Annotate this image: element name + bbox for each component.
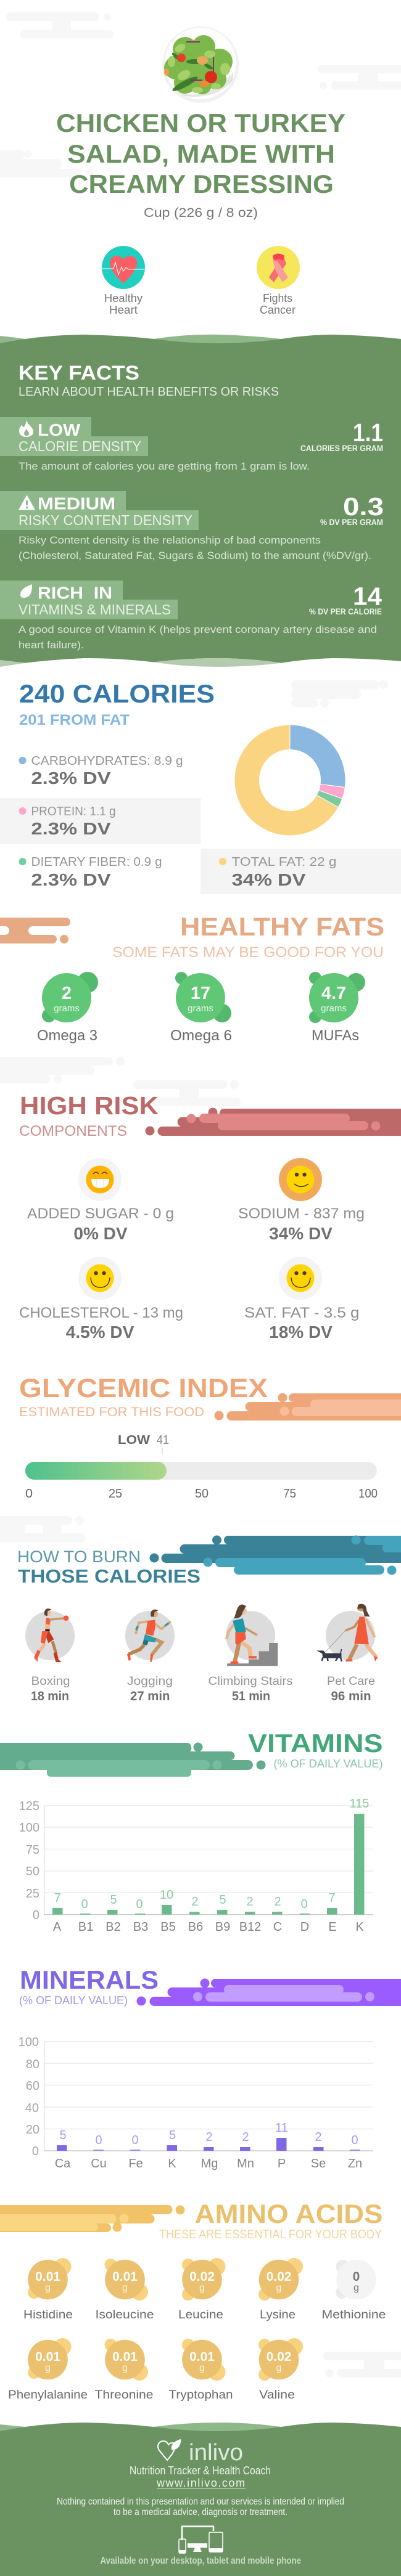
label: climbing stairs: [209, 1675, 292, 1703]
fact: medium risky content density: (Cholesterol, Saturated Fat, Sugars & Sodium) to the amount (%DV/gr).: [19, 550, 371, 561]
risk: cholesterol: CHOLESTEROL - 13 mg: [19, 1305, 183, 1321]
amino: methionine: 0: [353, 2270, 360, 2284]
fact: low calorie density: 1.1: [353, 418, 383, 447]
bar chart: vitamins: C: [273, 1920, 282, 1934]
amino: phenylalanine: [8, 2338, 88, 2402]
bar chart: minerals: 20: [26, 2123, 39, 2137]
amino: threonine: 0.01: [112, 2350, 138, 2364]
heading: how to burn: [17, 1547, 200, 1587]
heading: healthy fats: SOME FATS MAY BE GOOD FOR YOU: [112, 944, 384, 961]
amino: isoleucine: [95, 2259, 154, 2321]
fact: medium risky content density: RISKY CONTENT DENSITY: [19, 512, 192, 528]
footer website link: www.inlivo.com: [156, 2477, 245, 2489]
glycemic axis: [25, 1487, 378, 1501]
amino: isoleucine: Isoleucine: [95, 2309, 154, 2321]
heading: calories: 240 CALORIES: [19, 679, 215, 708]
amino: valine: g: [276, 2363, 281, 2373]
amino: histidine: 0.01: [35, 2270, 60, 2284]
bar chart: vitamins: 2: [274, 1895, 281, 1909]
icon: flame: [19, 420, 33, 437]
heading: glycemic index: ESTIMATED FOR THIS FOOD: [19, 1404, 204, 1419]
heading: glycemic index: [19, 1374, 268, 1419]
label: fights cancer: Cancer: [260, 304, 296, 316]
amino: valine: Valine: [259, 2389, 295, 2402]
label: fights cancer: [260, 292, 296, 316]
heading: healthy fats: HEALTHY FATS: [180, 912, 384, 941]
fat: omega 6: [170, 972, 232, 1044]
amino: phenylalanine: 0.01: [35, 2350, 60, 2364]
heading: healthy fats: [112, 912, 384, 961]
legend: carbohydrates: [19, 754, 183, 788]
amino: histidine: [23, 2258, 73, 2321]
fat: omega 3: [37, 972, 98, 1044]
title: CHICKEN OR TURKEY: [56, 108, 345, 137]
bar chart: vitamins: B1: [78, 1920, 93, 1934]
title: CREAMY DRESSING: [69, 169, 334, 198]
label: pet care: Pet Care: [327, 1675, 375, 1688]
activity: jogging: [125, 1610, 175, 1662]
bar chart: vitamins: D: [300, 1920, 309, 1934]
bar chart: minerals: Se: [311, 2157, 326, 2170]
amino: tryptophan: Tryptophan: [169, 2389, 233, 2402]
top background clouds: [0, 12, 401, 177]
risk: cholesterol: [19, 1257, 183, 1342]
label: fights cancer: Fights: [263, 292, 292, 304]
bar chart: minerals: 0: [95, 2134, 102, 2147]
bar chart: minerals: [19, 2036, 373, 2170]
amino: lysine: Lysine: [260, 2309, 296, 2321]
bar chart: minerals: 100: [19, 2036, 39, 2049]
bar chart: vitamins: 10: [160, 1888, 173, 1902]
icon: fights cancer: [257, 246, 300, 289]
glycemic axis: 50: [195, 1487, 209, 1501]
fact: medium risky content density: 0.3: [343, 492, 384, 521]
bar chart: minerals: 60: [26, 2079, 39, 2093]
amino: methionine: g: [353, 2283, 359, 2293]
bar chart: minerals: 5: [59, 2129, 67, 2142]
fat: omega 6: Omega 6: [170, 1027, 232, 1044]
risk: saturated fat: SAT. FAT - 3.5 g: [244, 1305, 359, 1321]
bar chart: minerals: Mg: [201, 2157, 218, 2170]
amino: threonine: Threonine: [95, 2389, 153, 2402]
label: jogging: [127, 1675, 173, 1703]
panel: key facts: [0, 335, 401, 667]
amino: leucine: 0.02: [189, 2270, 215, 2284]
bar chart: minerals: Fe: [128, 2157, 143, 2170]
bar chart: vitamins: 7: [328, 1891, 336, 1905]
bar chart: vitamins: 115: [350, 1797, 369, 1811]
fact: medium risky content density: MEDIUM: [38, 494, 115, 513]
bar chart: vitamins: 0: [136, 1897, 143, 1911]
fact: rich in vitamins and minerals: % DV PER CALORIE: [309, 607, 382, 616]
amino: tryptophan: 0.01: [189, 2350, 215, 2364]
risk: sodium: [238, 1158, 365, 1243]
decoration: vitamins: [0, 1743, 265, 1777]
bar chart: vitamins: B6: [188, 1920, 203, 1934]
heading: vitamins: (% OF DAILY VALUE): [274, 1758, 382, 1770]
bar chart: minerals: 0: [32, 2145, 39, 2158]
title: SALAD, MADE WITH: [67, 139, 335, 168]
fact: rich in vitamins and minerals: heart failure).: [19, 639, 84, 651]
bar chart: vitamins: B5: [160, 1920, 176, 1934]
bar chart: vitamins: E: [328, 1920, 337, 1934]
bar chart: vitamins: B2: [105, 1920, 121, 1934]
fact: rich in vitamins and minerals: VITAMINS & MINERALS: [19, 601, 171, 618]
label: healthy heart: Heart: [109, 304, 138, 316]
glycemic value: 41: [157, 1433, 169, 1447]
fact: rich in vitamins and minerals: [0, 581, 382, 651]
amino: leucine: g: [199, 2283, 205, 2293]
fat: mufas: 4.7: [321, 984, 346, 1003]
amino: tryptophan: [169, 2339, 233, 2402]
fact: rich in vitamins and minerals: 14: [353, 582, 382, 610]
heading: amino acids: [159, 2199, 382, 2241]
legend: total fat: 34% DV: [232, 870, 306, 889]
label: jogging: 27 min: [130, 1689, 170, 1703]
amino: tryptophan: g: [199, 2363, 205, 2373]
fat: omega 6: 17: [191, 984, 210, 1003]
heading: high risk: [19, 1091, 159, 1139]
bar chart: vitamins: 7: [54, 1891, 61, 1905]
fact: rich in vitamins and minerals: A good source of Vitamin K (helps prevent coronary artery disease and: [19, 624, 377, 635]
label: healthy heart: [104, 292, 143, 316]
heading: how to burn: THOSE CALORIES: [18, 1565, 200, 1587]
amino: methionine: Methionine: [322, 2309, 386, 2321]
amino: leucine: Leucine: [178, 2309, 223, 2321]
bar chart: vitamins: 50: [26, 1865, 39, 1878]
macro row backgrounds: [0, 798, 401, 894]
bar chart: minerals: 0: [131, 2134, 139, 2147]
bar chart: vitamins: 125: [19, 1800, 39, 1813]
fat: mufas: [309, 972, 365, 1044]
background cloud: burn: [0, 1516, 86, 1542]
decoration: burn: [149, 1536, 401, 1575]
heading: amino acids: AMINO ACIDS: [195, 2199, 382, 2229]
logo: inlivo: [158, 2439, 243, 2466]
decoration: glycemic index: [215, 1393, 401, 1420]
risk: added sugar: 0% DV: [73, 1224, 128, 1243]
panel: footer: [0, 2423, 401, 2576]
fat: mufas: grams: [321, 1003, 347, 1014]
fat: omega 6: grams: [188, 1003, 213, 1014]
risk: added sugar: ADDED SUGAR - 0 g: [27, 1205, 174, 1222]
legend: dietary fiber: 2.3% DV: [31, 870, 111, 889]
icon: healthy heart: [102, 246, 145, 289]
bar chart: minerals: Mn: [237, 2157, 254, 2170]
bar chart: vitamins: 75: [26, 1843, 39, 1857]
heading: glycemic index: GLYCEMIC INDEX: [19, 1374, 268, 1403]
bar chart: vitamins: 5: [219, 1893, 226, 1907]
heading: key facts: KEY FACTS: [19, 362, 139, 384]
bar chart: vitamins: 2: [191, 1895, 199, 1909]
glycemic axis: 25: [109, 1487, 122, 1501]
heading: key facts: [19, 362, 279, 399]
amino: histidine: g: [45, 2283, 51, 2293]
glycemic axis: 100: [358, 1487, 378, 1501]
decoration: healthy fats: [0, 918, 70, 944]
icon: leaf: [20, 584, 32, 598]
bar chart: vitamins: K: [355, 1920, 364, 1934]
footer availability note: Available on your desktop, tablet and mobile phone: [100, 2556, 301, 2566]
footer disclaimer: [57, 2497, 344, 2517]
legend: protein: [19, 805, 116, 838]
risk: sodium: 34% DV: [269, 1224, 333, 1243]
amino: lysine: g: [276, 2283, 281, 2293]
heading: vitamins: VITAMINS: [248, 1729, 382, 1758]
risk: saturated fat: [244, 1257, 359, 1342]
activity: climbing stairs: [226, 1604, 278, 1666]
label: boxing: [31, 1675, 70, 1703]
label: jogging: Jogging: [127, 1675, 173, 1688]
fat: omega 3: grams: [54, 1003, 80, 1014]
decoration: minerals: [137, 1978, 401, 2006]
bar chart: minerals: Cu: [91, 2157, 107, 2170]
fact: low calorie density: LOW: [38, 420, 81, 439]
footer disclaimer: to be a medical advice, diagnosis or treatment.: [114, 2507, 287, 2517]
fact: medium risky content density: Risky Content density is the relationship of bad components: [19, 534, 321, 546]
bar chart: vitamins: 0: [300, 1897, 308, 1911]
risk: added sugar: [27, 1158, 174, 1243]
bar chart: vitamins: 100: [19, 1821, 39, 1835]
fact: low calorie density: The amount of calories you are getting from 1 gram is low.: [19, 460, 310, 472]
label: climbing stairs: Climbing Stairs: [209, 1675, 292, 1688]
icon: warning triangle: [19, 495, 35, 510]
bar chart: vitamins: 5: [110, 1893, 117, 1907]
bar chart: minerals: 2: [205, 2130, 213, 2144]
bar chart: vitamins: 2: [246, 1895, 254, 1909]
label: boxing: 18 min: [31, 1689, 69, 1703]
bar chart: vitamins: 0: [33, 1909, 39, 1922]
bar chart: vitamins: A: [53, 1920, 62, 1934]
amino: isoleucine: 0.01: [112, 2270, 138, 2284]
heading: vitamins: [248, 1729, 382, 1770]
title: [56, 108, 345, 198]
label: healthy heart: Healthy: [104, 292, 143, 304]
heading: high risk: COMPONENTS: [19, 1123, 127, 1139]
risk: cholesterol: 4.5% DV: [66, 1323, 134, 1342]
bar chart: minerals: 80: [26, 2058, 39, 2071]
heading: calories: [19, 679, 215, 728]
legend: carbohydrates: CARBOHYDRATES: 8.9 g: [31, 754, 183, 768]
activity: pet care: [316, 1604, 378, 1661]
background clouds: high risk: [0, 1057, 241, 1106]
footer disclaimer: Nothing contained in this presentation and our services is intended or implied: [57, 2497, 344, 2507]
icon: devices: [179, 2527, 223, 2553]
legend: protein: PROTEIN: 1.1 g: [31, 805, 116, 818]
bar chart: vitamins: B9: [215, 1920, 230, 1934]
label: pet care: 96 min: [331, 1689, 371, 1703]
fact: medium risky content density: % DV PER GRAM: [320, 518, 383, 527]
glycemic axis: 0: [25, 1487, 33, 1501]
heading: key facts: LEARN ABOUT HEALTH BENEFITS OR RISKS: [19, 385, 279, 399]
footer tagline: Nutrition Tracker & Health Coach: [130, 2464, 271, 2477]
bar chart: vitamins: 0: [81, 1897, 88, 1911]
glycemic bar: [25, 1462, 377, 1480]
fact: rich in vitamins and minerals: RICH IN: [38, 583, 112, 603]
decoration: high risk: [146, 1108, 401, 1136]
amino: phenylalanine: g: [45, 2363, 51, 2373]
amino: threonine: [95, 2339, 153, 2402]
background cloud: calories: [291, 680, 388, 707]
bar chart: minerals: P: [278, 2157, 286, 2170]
heading: high risk: HIGH RISK: [20, 1091, 159, 1120]
heading: amino acids: THESE ARE ESSENTIAL FOR YOUR BODY: [159, 2228, 382, 2241]
heading: minerals: (% OF DAILY VALUE): [19, 1994, 128, 2007]
legend: carbohydrates: 2.3% DV: [31, 768, 111, 788]
bar chart: minerals: 0: [351, 2134, 358, 2147]
fat: omega 3: 2: [62, 984, 72, 1003]
amino: leucine: [178, 2258, 226, 2321]
fact: medium risky content density: [0, 491, 384, 561]
serving size: Cup (226 g / 8 oz): [144, 206, 258, 220]
bar chart: minerals: 2: [315, 2130, 322, 2144]
legend: total fat: [219, 855, 337, 889]
amino: histidine: Histidine: [23, 2309, 73, 2321]
bar chart: vitamins: B12: [239, 1920, 261, 1934]
heading: how to burn: HOW TO BURN: [17, 1547, 141, 1566]
fact: low calorie density: [0, 417, 383, 472]
label: boxing: Boxing: [31, 1675, 70, 1688]
bar chart: minerals: 5: [169, 2129, 176, 2142]
label: pet care: [327, 1675, 375, 1703]
legend: protein: 2.3% DV: [31, 819, 111, 838]
bar chart: minerals: K: [168, 2157, 176, 2170]
fat: omega 3: Omega 3: [37, 1027, 97, 1044]
risk: saturated fat: 18% DV: [269, 1323, 333, 1342]
amino: threonine: g: [122, 2363, 128, 2373]
glycemic value: LOW: [118, 1433, 150, 1447]
label: climbing stairs: 51 min: [232, 1689, 270, 1703]
amino: methionine: [322, 2260, 386, 2321]
bar chart: vitamins: 25: [26, 1887, 39, 1901]
risk: sodium: SODIUM - 837 mg: [238, 1205, 365, 1222]
heading: minerals: [19, 1965, 159, 2007]
legend: dietary fiber: [19, 855, 162, 889]
glycemic value: [118, 1433, 169, 1454]
bar chart: minerals: Ca: [55, 2157, 71, 2170]
bar chart: minerals: 40: [25, 2101, 39, 2115]
amino: isoleucine: g: [122, 2283, 128, 2293]
legend: dietary fiber: DIETARY FIBER: 0.9 g: [31, 855, 162, 869]
icon: salad bowl: [162, 26, 239, 103]
amino: valine: 0.02: [267, 2350, 291, 2364]
fat: mufas: MUFAs: [312, 1027, 359, 1044]
bar chart: minerals: 2: [242, 2130, 249, 2144]
amino: phenylalanine: Phenylalanine: [8, 2389, 88, 2402]
legend: total fat: TOTAL FAT: 22 g: [232, 855, 337, 869]
donut chart: [234, 725, 345, 836]
amino: lysine: [258, 2258, 303, 2321]
amino: valine: [258, 2338, 303, 2402]
heading: minerals: MINERALS: [20, 1965, 159, 1994]
bar chart: vitamins: B3: [133, 1920, 148, 1934]
fact: low calorie density: CALORIES PER GRAM: [300, 444, 383, 453]
decoration: amino acids: [0, 2205, 185, 2232]
logo: inlivo: inlivo: [189, 2440, 243, 2466]
heading: calories: 201 FROM FAT: [19, 712, 130, 728]
fact: low calorie density: CALORIE DENSITY: [19, 438, 141, 454]
amino: lysine: 0.02: [267, 2270, 291, 2284]
bar chart: vitamins: [19, 1797, 373, 1934]
bar chart: minerals: Zn: [348, 2157, 362, 2170]
bar chart: minerals: 11: [275, 2121, 288, 2135]
activity: boxing: [25, 1608, 75, 1662]
glycemic axis: 75: [283, 1487, 296, 1501]
background cloud: amino acids: [323, 2352, 401, 2378]
